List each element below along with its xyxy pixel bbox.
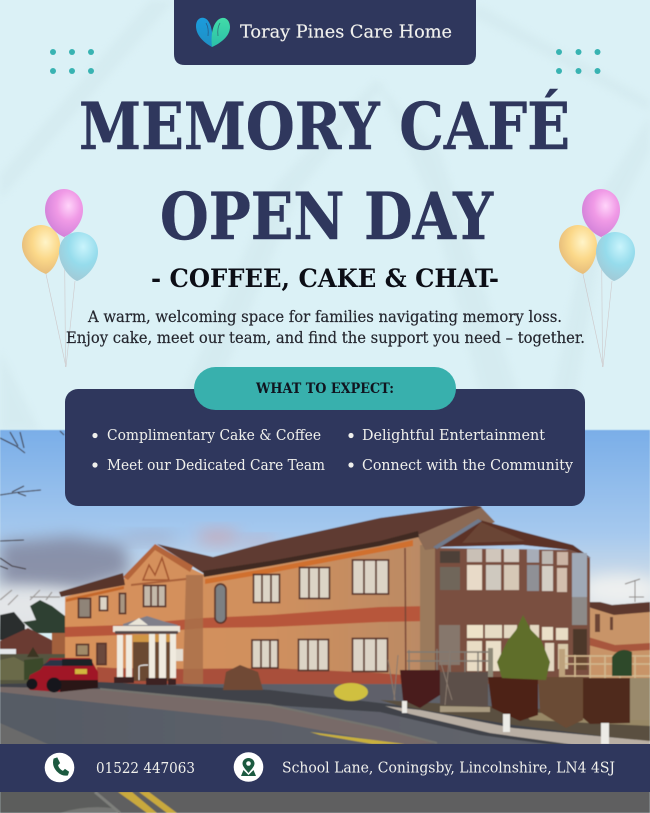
icon: location pin [234, 752, 263, 782]
address: School Lane, Coningsby, Lincolnshire, LN4 4SJ [282, 758, 615, 776]
header tab [174, 0, 476, 65]
footer contact bar [0, 744, 650, 792]
main wall [65, 535, 437, 702]
pill heading: WHAT TO EXPECT: [255, 381, 394, 397]
porch [113, 616, 183, 685]
fences [407, 648, 493, 678]
list right column: Delightful Entertainment [362, 426, 545, 444]
list left column: Meet our Dedicated Care Team [107, 456, 325, 474]
ground and gravel [380, 700, 650, 742]
roofs [59, 573, 125, 597]
list left column [92, 426, 325, 474]
photo: care home building [0, 430, 650, 813]
shrubs [223, 665, 263, 690]
list right column [348, 426, 573, 474]
panel: what to expect [65, 367, 585, 506]
list right column: Connect with the Community [362, 456, 573, 474]
sky [0, 430, 650, 630]
background trees and house [0, 612, 25, 640]
intro text [66, 307, 585, 347]
hedges [400, 670, 440, 708]
bay section [435, 548, 590, 690]
title: Memory Café: MEMORY CAFÉ [79, 88, 570, 165]
phone number: 01522 447063 [96, 759, 195, 777]
conifer [497, 615, 550, 680]
road and pavements [0, 684, 650, 745]
lower road strip [0, 790, 650, 813]
brick bands [65, 606, 430, 637]
icon: balloons left [22, 189, 98, 367]
subtitle: - COFFEE, CAKE & CHAT- [151, 264, 499, 293]
panel: light blue background [0, 0, 650, 431]
intro text: Enjoy cake, meet our team, and find the support you need – together. [66, 328, 585, 347]
list left column: Complimentary Cake & Coffee [107, 426, 321, 444]
bare branches [0, 431, 64, 569]
red car [26, 658, 98, 692]
icon: balloons right [559, 189, 635, 367]
icon: phone [45, 753, 74, 782]
title: Open Day: OPEN DAY [160, 179, 494, 255]
gable end of main roof [417, 506, 495, 550]
logo text: Toray Pines Care Home [240, 22, 452, 42]
brick piers [183, 575, 203, 685]
decorative dots: right [556, 49, 600, 74]
decorative dots: left [50, 49, 94, 74]
windows [76, 560, 388, 672]
bollards [402, 701, 609, 744]
icon: heart logo [196, 18, 230, 47]
gable ornament [143, 558, 169, 580]
pill heading [194, 367, 456, 410]
intro text: A warm, welcoming space for families navigating memory loss. [87, 307, 562, 326]
right wing [588, 608, 650, 680]
